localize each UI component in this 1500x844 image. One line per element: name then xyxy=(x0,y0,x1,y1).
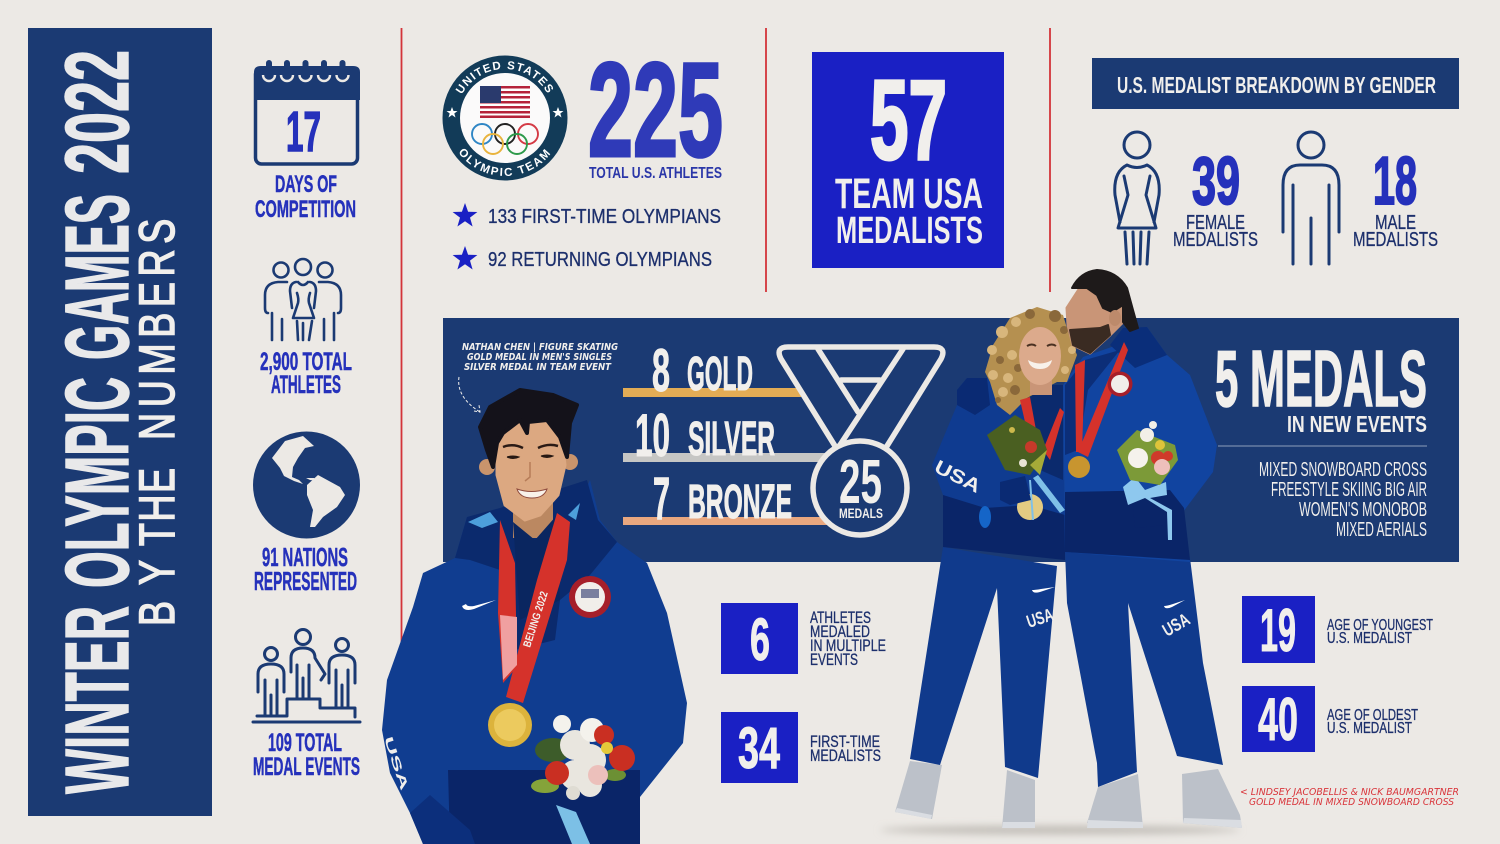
stat: 2,900 total athletes xyxy=(260,259,352,399)
stat: 7 bronze: 7 xyxy=(653,465,670,532)
icon: swoosh xyxy=(462,600,496,610)
caption: Nathan Chen xyxy=(462,342,618,373)
stat: 225 total athletes xyxy=(588,36,723,185)
stat: 39 female medalists: MEDALISTS xyxy=(1173,229,1258,251)
stat: 6 athletes medaled in multiple events: IN MULTIPLE xyxy=(810,637,886,655)
title: Winter Olympic Games 2022: OLYMPIC xyxy=(48,377,148,588)
stat: 91 nations represented: REPRESENTED xyxy=(254,566,357,596)
jacket xyxy=(382,480,687,844)
stat: 18 male medalists: MALE xyxy=(1375,212,1416,234)
subtitle: by the numbers xyxy=(130,219,185,626)
icon: globe xyxy=(253,432,360,538)
stat: 6 athletes medaled in multiple events xyxy=(721,603,886,674)
stat: 40 age of oldest medalist: U.S. MEDALIST xyxy=(1327,720,1412,737)
sleeve USA: USA xyxy=(931,457,984,498)
icon: jacket patch xyxy=(569,576,611,618)
subtitle: by the numbers: NUMBERS xyxy=(130,219,185,440)
panel: 57 Team USA medalists: TEAM USA xyxy=(835,170,983,218)
caption: Jacobellis and Baumgartner xyxy=(1240,787,1459,808)
icon: gold medal xyxy=(488,703,532,747)
list: new events xyxy=(1259,459,1427,541)
stat: 17 days of competition xyxy=(254,63,360,223)
stat: 2,900 total athletes: 2,900 TOTAL xyxy=(260,348,352,376)
stat: 225 total athletes: 225 xyxy=(588,36,723,185)
stat: 8 gold xyxy=(652,337,753,404)
photo: Lindsey Jacobellis and Nick Baumgartner xyxy=(880,270,1242,834)
photo: Lindsey Jacobellis and Nick Baumgartner: USA xyxy=(1159,609,1193,640)
panel: gender breakdown header xyxy=(1092,58,1459,109)
stat: 91 nations represented xyxy=(253,432,360,596)
stat: 19 age of youngest medalist: 19 xyxy=(1260,597,1296,664)
ground shadow xyxy=(880,826,1240,834)
stat: 109 total medal events: 109 TOTAL xyxy=(268,729,342,757)
subtitle: by the numbers: THE xyxy=(130,468,185,546)
man ribbon and medal xyxy=(1068,342,1128,478)
medal bars xyxy=(623,388,827,525)
icon: male figure xyxy=(1283,132,1339,264)
ribbon xyxy=(498,513,570,703)
stat: 40 age of oldest medalist: 40 xyxy=(1258,686,1298,753)
stat: 6 athletes medaled in multiple events: 6 xyxy=(750,606,770,673)
title: Winter Olympic Games 2022 xyxy=(48,50,148,794)
stat: 109 total medal events xyxy=(253,630,360,781)
list: new events: WOMEN'S MONOBOB xyxy=(1299,499,1427,521)
stat: 5 medals in new events xyxy=(1215,334,1427,446)
stat: 225 total athletes: TOTAL U.S. ATHLETES xyxy=(589,165,722,182)
caption: Jacobellis and Baumgartner: GOLD MEDAL IN MIXED SNOWBOARD CROSS xyxy=(1249,797,1454,808)
stat: 39 female medalists: 39 xyxy=(1192,143,1240,219)
sleeve USA: USA xyxy=(381,735,412,793)
icon: three athletes xyxy=(265,259,341,340)
stat: returning Olympians: 92 RETURNING OLYMPIANS xyxy=(488,248,712,271)
stat: 34 first-time medalists: FIRST-TIME xyxy=(810,733,880,751)
zip collar xyxy=(513,515,560,620)
subtitle: by the numbers: BY xyxy=(130,560,185,626)
logo: United States Olympic Team xyxy=(442,56,568,180)
stat: 17 days of competition: COMPETITION xyxy=(255,196,356,223)
bouquet xyxy=(531,715,635,844)
man jacket xyxy=(1063,327,1217,562)
caption: Nathan Chen: NATHAN CHEN | FIGURE SKATING xyxy=(462,342,618,353)
panel: 57 Team USA medalists xyxy=(812,52,1004,268)
stat: 17 days of competition: DAYS OF xyxy=(275,171,337,198)
stat: 40 age of oldest medalist xyxy=(1242,686,1418,753)
logo: United States Olympic Team: OLYMPIC TEAM xyxy=(460,148,550,176)
woman bouquet xyxy=(987,415,1047,475)
stat: returning Olympians xyxy=(453,246,712,271)
title: Winter Olympic Games 2022: GAMES xyxy=(48,194,148,360)
title: Winter Olympic Games 2022: WINTER xyxy=(48,606,148,794)
caption: Jacobellis and Baumgartner: < LINDSEY JACOBELLIS & NICK BAUMGARTNER xyxy=(1240,787,1459,798)
woman jacket xyxy=(932,378,1065,558)
icon: Olympic rings xyxy=(472,124,538,154)
caption: Nathan Chen: GOLD MEDAL IN MEN'S SINGLES xyxy=(467,352,612,363)
woman pants xyxy=(910,547,1057,778)
pants USA marks: USA xyxy=(1024,604,1056,632)
stat: first-time Olympians: 133 FIRST-TIME OLYMPIANS xyxy=(488,205,721,228)
panel: medal count and new events: GOLD xyxy=(687,348,753,401)
stat: 6 athletes medaled in multiple events: ATHLETES xyxy=(810,609,871,627)
woman head xyxy=(985,307,1077,415)
stat: 7 bronze xyxy=(653,465,792,532)
photo: Nathan Chen xyxy=(381,390,687,844)
man head xyxy=(1067,270,1138,353)
man pants xyxy=(1065,551,1223,787)
stat: 8 gold: 8 xyxy=(652,337,670,404)
stat: 91 nations represented: 91 NATIONS xyxy=(262,542,348,572)
stat: 19 age of youngest medalist xyxy=(1242,596,1433,664)
stat: 18 male medalists xyxy=(1283,132,1438,264)
icon: calendar xyxy=(254,63,360,164)
stat: 34 first-time medalists xyxy=(721,712,881,783)
icon: medal with 25 medals: MEDALS xyxy=(839,505,883,521)
stat: 39 female medalists: FEMALE xyxy=(1186,212,1245,234)
photo: Nathan Chen: BEIJING 2022 xyxy=(521,590,551,649)
stat: 5 medals in new events: IN NEW EVENTS xyxy=(1287,411,1427,437)
woman ribbon and medal xyxy=(1000,397,1065,520)
icon: podium xyxy=(253,630,360,722)
stat: 109 total medal events: MEDAL EVENTS xyxy=(253,753,360,781)
icon: medal with 25 medals xyxy=(779,347,943,535)
icon: medal with 25 medals: 25 xyxy=(839,448,882,517)
panel: 57 Team USA medalists: MEDALISTS xyxy=(836,210,983,252)
stat: 18 male medalists: MEDALISTS xyxy=(1353,229,1438,251)
stat: first-time Olympians xyxy=(453,203,721,228)
stat: 39 female medalists xyxy=(1115,132,1258,264)
stat: 40 age of oldest medalist: AGE OF OLDEST xyxy=(1327,707,1418,724)
head xyxy=(479,390,578,538)
stat: 6 athletes medaled in multiple events: EVENTS xyxy=(810,651,858,669)
icon: jacket patch xyxy=(1108,372,1132,396)
panel: title sidebar xyxy=(28,28,212,816)
icon: female figure xyxy=(1115,132,1159,264)
stat: 10 silver xyxy=(635,402,775,469)
icon: calendar: 17 xyxy=(286,100,321,164)
stat: 19 age of youngest medalist: U.S. MEDALIST xyxy=(1327,630,1412,647)
icon: US flag xyxy=(480,86,530,118)
logo: United States Olympic Team: UNITED STATES xyxy=(456,61,553,93)
stat: 10 silver: 10 xyxy=(635,402,670,469)
stat: 2,900 total athletes: ATHLETES xyxy=(271,371,341,399)
arrow: caption to Nathan Chen xyxy=(459,377,480,412)
stat: 34 first-time medalists: 34 xyxy=(738,716,780,781)
stat: 10 silver: SILVER xyxy=(688,413,775,466)
boots xyxy=(895,761,1242,828)
panel: 57 Team USA medalists: 57 xyxy=(870,57,947,183)
stat: 19 age of youngest medalist: AGE OF YOUNGEST xyxy=(1327,617,1433,634)
panel: medal count and new events xyxy=(443,318,1459,562)
stat: 18 male medalists: 18 xyxy=(1373,143,1417,219)
stat: 34 first-time medalists: MEDALISTS xyxy=(810,747,881,765)
stat: 7 bronze: BRONZE xyxy=(688,476,792,529)
stat: 6 athletes medaled in multiple events: MEDALED xyxy=(810,623,870,641)
list: new events: MIXED AERIALS xyxy=(1336,519,1427,541)
man bouquet xyxy=(1117,421,1178,540)
caption: Nathan Chen: SILVER MEDAL IN TEAM EVENT xyxy=(464,362,612,373)
